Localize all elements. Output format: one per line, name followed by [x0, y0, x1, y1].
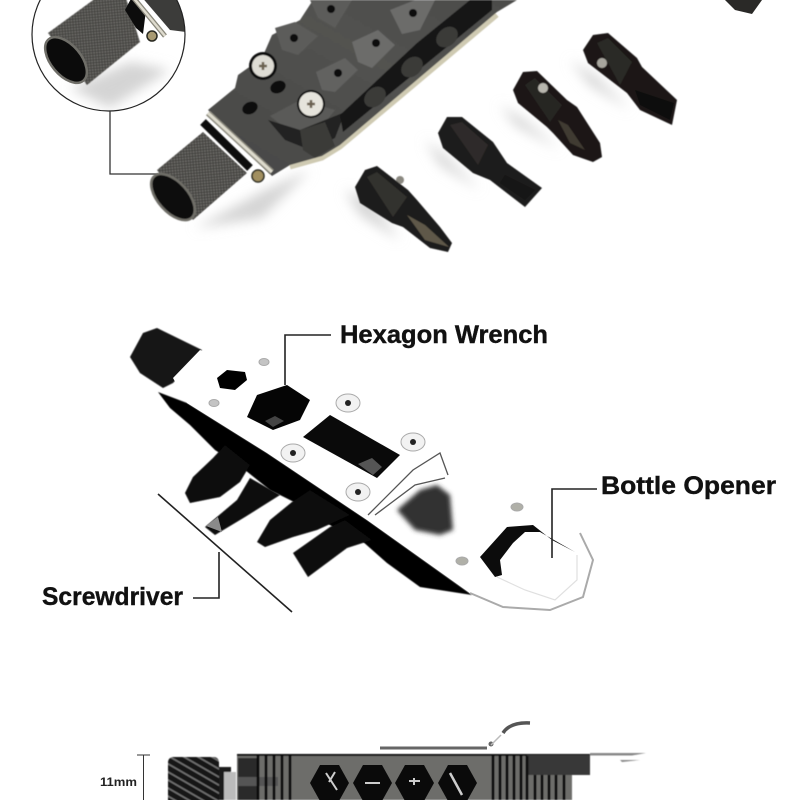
- leader line from inset to grip: [110, 111, 158, 174]
- drop shadows: [195, 60, 630, 240]
- dark grooves: [268, 112, 345, 150]
- panel: multi-tool plate (middle): [42, 321, 776, 612]
- large hexagon reflection: [265, 416, 284, 427]
- side knob: [168, 757, 236, 800]
- raised pads: [275, 22, 318, 55]
- tool housing: [208, 0, 517, 176]
- dimension 11mm: [100, 755, 150, 800]
- bit highlights: [206, 517, 222, 532]
- steel plate: [173, 350, 593, 610]
- side body: [237, 753, 646, 800]
- loop outline: [470, 533, 593, 610]
- underside black band: [158, 392, 472, 595]
- label: screwdriver: [42, 494, 292, 612]
- rectangular window: [303, 415, 400, 478]
- knurled grip: [143, 113, 272, 228]
- inner loop outline: [497, 555, 577, 600]
- small hexagon hole: [217, 370, 247, 390]
- window reflection: [358, 458, 382, 475]
- bit: cropped top right: [725, 0, 762, 14]
- dimension 11mm: 11mm: [100, 775, 137, 789]
- bottle opener hole: [480, 525, 575, 577]
- hexagon bit slots: [310, 765, 477, 800]
- label: screwdriver: Screwdriver: [42, 583, 183, 611]
- clip shadow: [397, 485, 453, 535]
- large hexagon hole: [247, 385, 310, 430]
- belt clip: [380, 723, 530, 748]
- label: bottle opener: Bottle Opener: [601, 472, 776, 500]
- screw centres: [290, 400, 416, 495]
- label: bottle opener: [552, 472, 776, 558]
- label: hexagon wrench: [285, 321, 548, 385]
- knob: [130, 328, 202, 388]
- clip edge: [368, 453, 448, 515]
- panel: side view with dimension (bottom): [100, 723, 646, 800]
- bit: phillips 1: [355, 166, 452, 252]
- rivets and torx screws: [209, 358, 523, 565]
- bit: flat 2: [583, 33, 677, 125]
- label: hexagon wrench: Hexagon Wrench: [340, 321, 548, 349]
- inset circle with zoomed knurled grip: [32, 0, 186, 111]
- bit: phillips 2: [513, 71, 602, 162]
- bit: flat 1: [438, 117, 542, 207]
- panel: tool body with bits (top): [32, 0, 762, 252]
- screwdriver bits: [185, 445, 372, 577]
